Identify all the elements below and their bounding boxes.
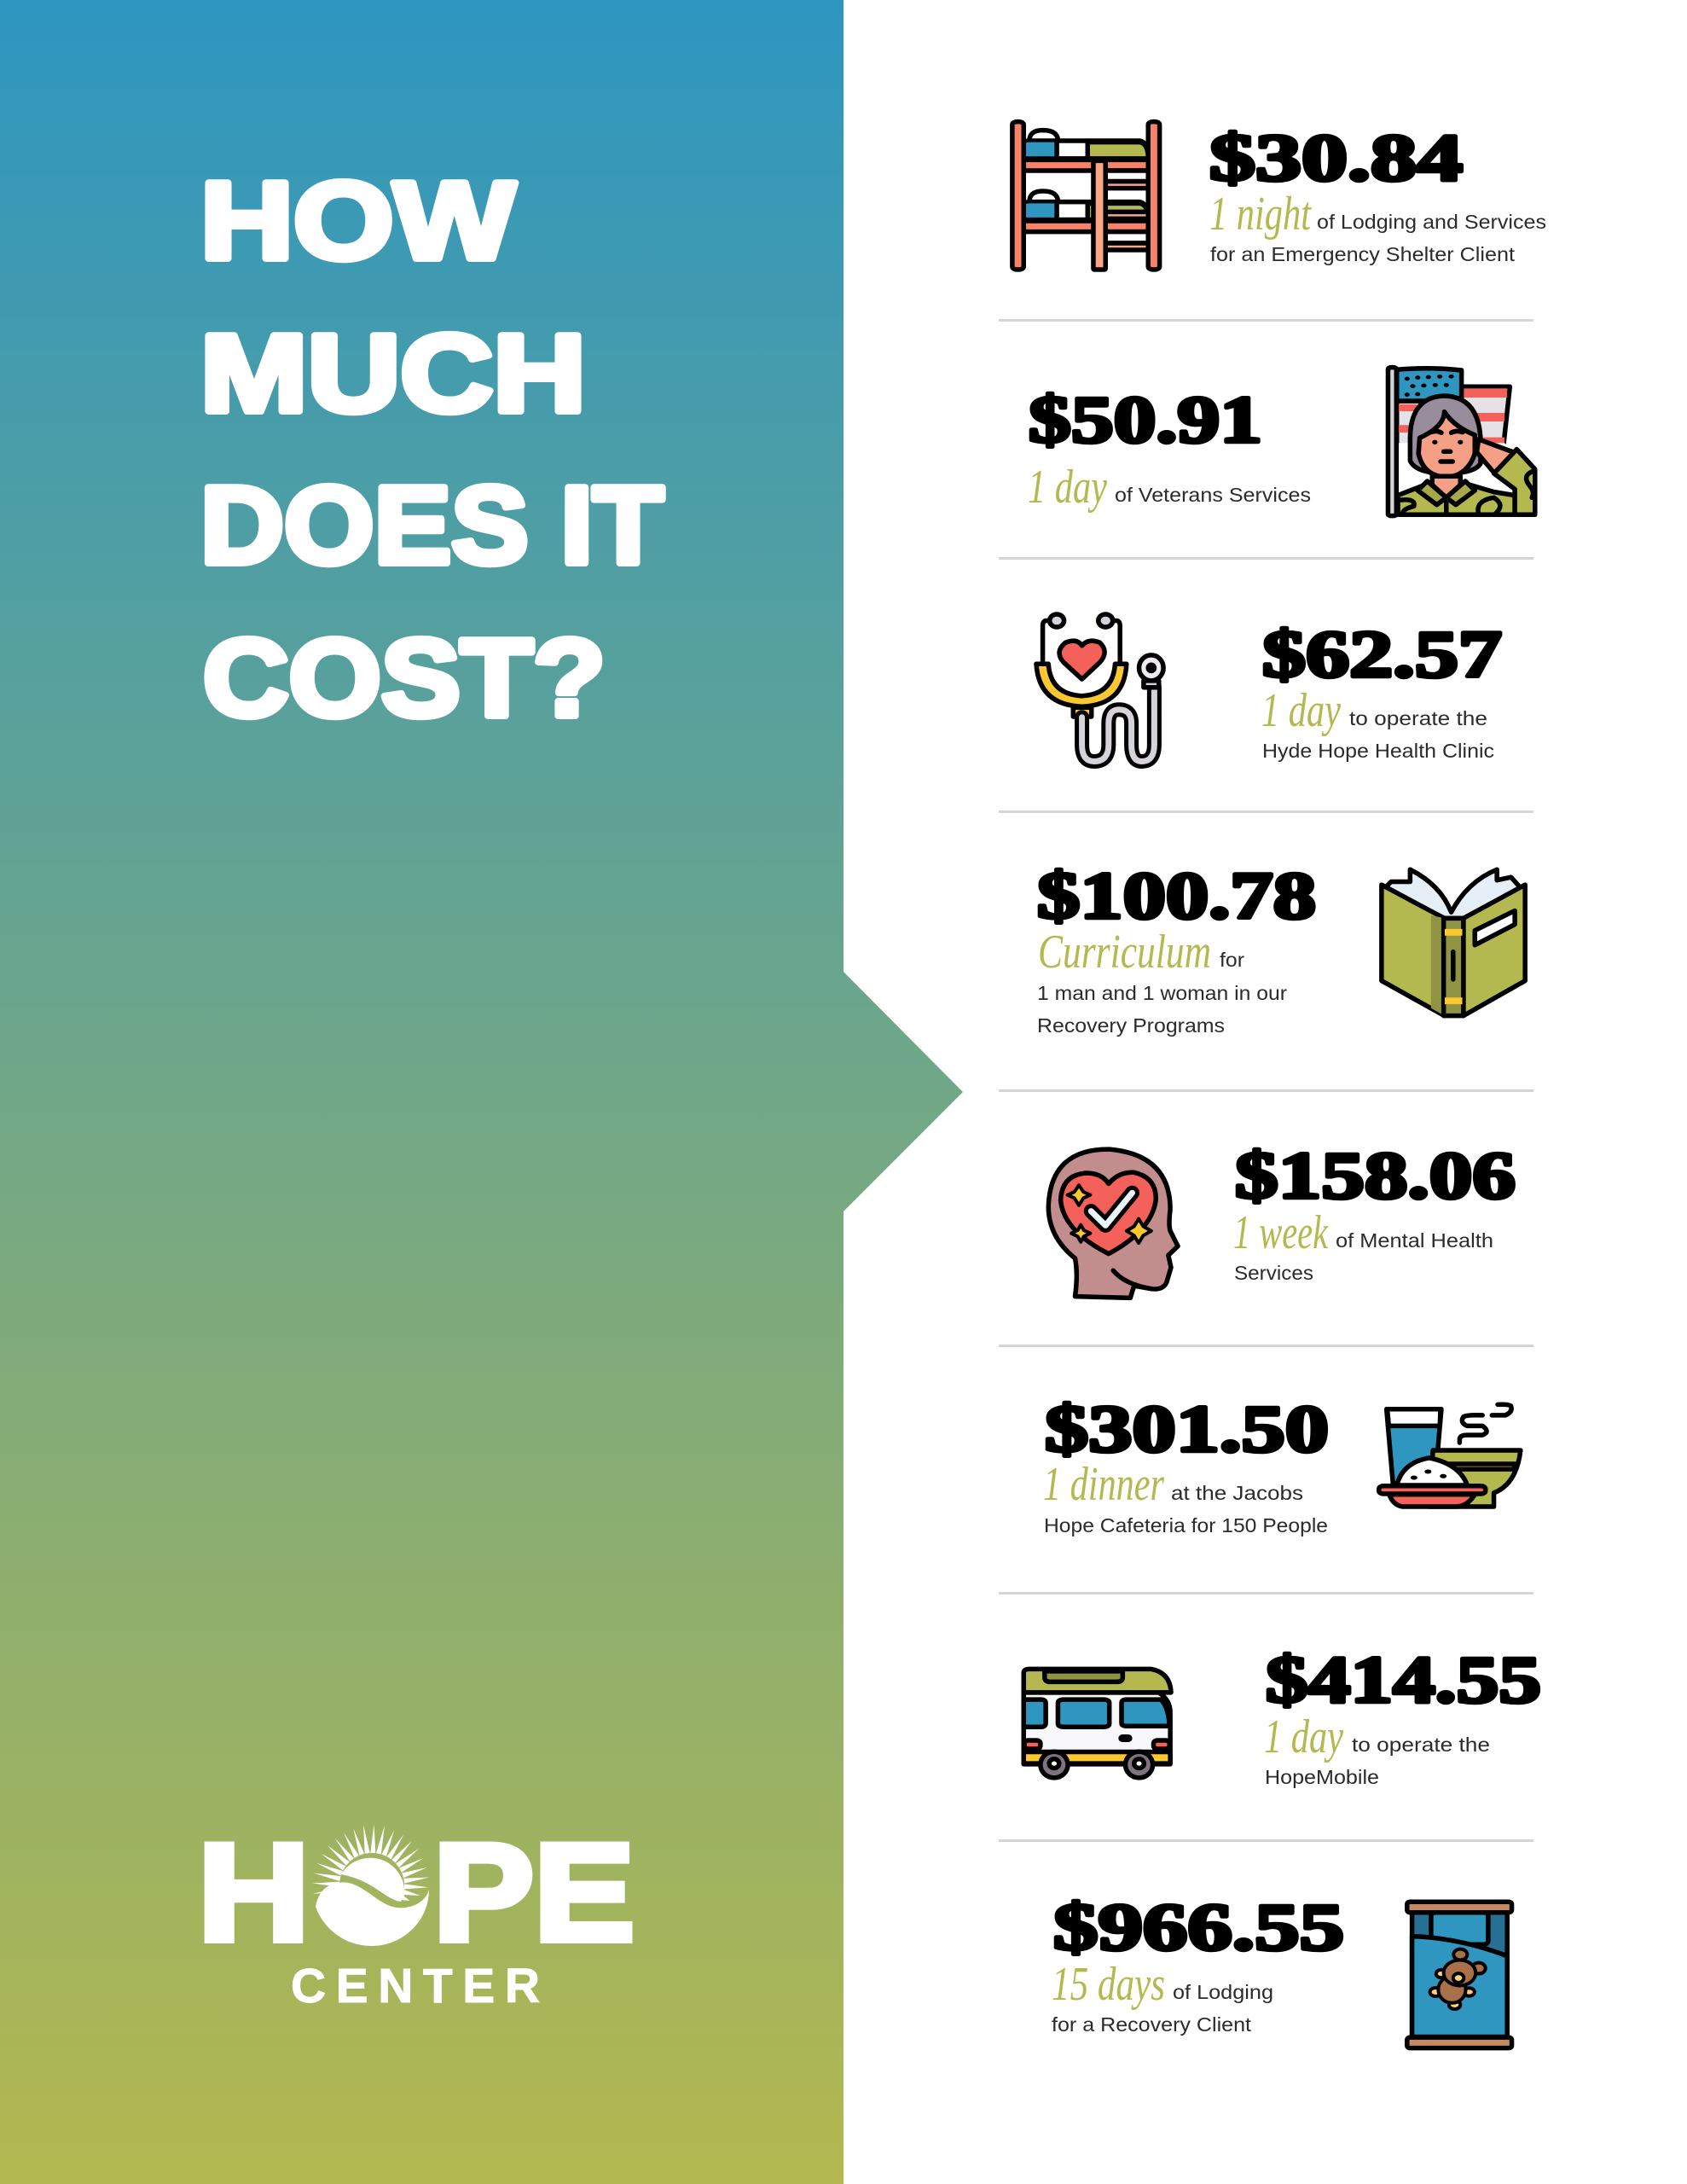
panel: HopeMobile cost [1023, 1642, 1541, 1788]
icon: saluting veteran with flag [1388, 368, 1535, 516]
description: of Veterans Services [1115, 484, 1311, 506]
description [1210, 211, 1546, 265]
description [1052, 1981, 1273, 2036]
script label: 1 dinner [1043, 1458, 1164, 1511]
description [1044, 1482, 1328, 1536]
script label: 1 week [1233, 1206, 1329, 1259]
script label: 1 night [1209, 188, 1312, 241]
description: for an Emergency Shelter Client [1210, 243, 1516, 265]
price: $414.55 [1266, 1642, 1541, 1716]
icon: stethoscope [1036, 614, 1163, 761]
panel: mental health cost [1048, 1138, 1516, 1298]
description [1234, 1229, 1493, 1284]
script label: 1 day [1264, 1711, 1343, 1763]
description [1037, 949, 1287, 1037]
title: MUCH [200, 312, 586, 435]
description: of Mental Health [1336, 1229, 1493, 1252]
icon: bus [1023, 1669, 1171, 1778]
price: $158.06 [1235, 1138, 1516, 1212]
description [1265, 1734, 1490, 1788]
panel: curriculum cost [1037, 858, 1525, 1037]
icon: bed with teddy bear [1407, 1902, 1512, 2048]
description: for [1220, 949, 1244, 971]
description: 1 man and 1 woman in our [1037, 982, 1287, 1004]
icon: open book [1382, 869, 1525, 1016]
description [1262, 707, 1494, 762]
price: $30.84 [1209, 120, 1463, 195]
icon: meal with water [1379, 1404, 1521, 1507]
panel: health clinic cost [1036, 614, 1502, 762]
script label: Curriculum [1038, 926, 1211, 979]
title: DOES IT [200, 464, 664, 587]
price: $301.50 [1045, 1391, 1329, 1466]
panel: dinner cost [1043, 1391, 1521, 1536]
description: to operate the [1349, 707, 1487, 729]
price: $50.91 [1029, 382, 1262, 456]
logo: Hope Center [198, 1815, 635, 2013]
description: to operate the [1352, 1734, 1490, 1756]
script label: 1 day [1028, 461, 1107, 514]
description: of Lodging and Services [1317, 211, 1546, 233]
description: Hope Cafeteria for 150 People [1044, 1514, 1328, 1536]
logo: Hope Center: H [198, 1815, 310, 1970]
icon: bunk bed [1012, 122, 1160, 270]
description: at the Jacobs [1171, 1482, 1303, 1504]
description: Services [1234, 1262, 1313, 1284]
panel: veterans services cost [1028, 368, 1535, 516]
title: HOW [200, 160, 515, 282]
description: HopeMobile [1265, 1766, 1379, 1788]
price: $100.78 [1037, 858, 1316, 932]
panel: recovery lodging cost [1052, 1890, 1512, 2048]
description: of Lodging [1173, 1981, 1273, 2003]
panel: emergency shelter cost [1012, 120, 1546, 270]
title: COST? [203, 617, 606, 740]
price: $966.55 [1053, 1890, 1344, 1964]
script label: 15 days [1052, 1958, 1165, 2011]
title [200, 160, 664, 740]
price: $62.57 [1262, 617, 1502, 691]
logo: Hope Center: PE [433, 1815, 635, 1970]
description: for a Recovery Client [1052, 2013, 1252, 2036]
description: Recovery Programs [1037, 1014, 1225, 1037]
script label: 1 day [1261, 684, 1341, 737]
icon: head with heart [1048, 1149, 1178, 1298]
logo: Hope Center: CENTER [291, 1959, 540, 2013]
panel: gradient background with arrow [0, 0, 963, 2184]
description: Hyde Hope Health Clinic [1262, 740, 1494, 762]
